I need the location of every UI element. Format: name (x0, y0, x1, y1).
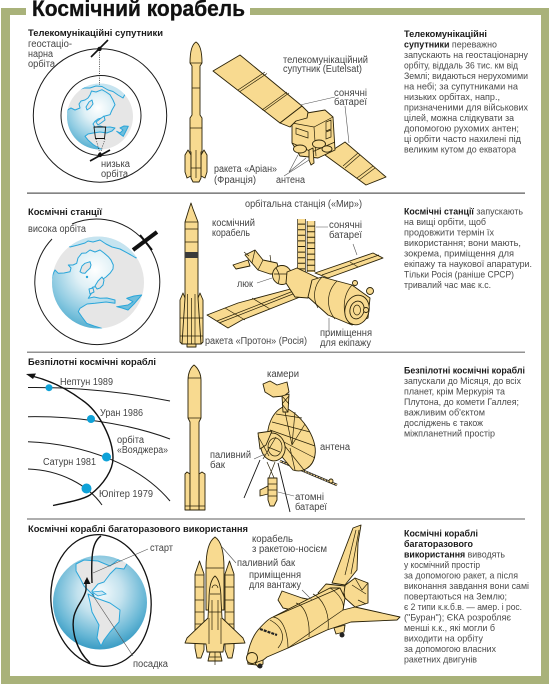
labels: planets: Уран 1986 (100, 408, 143, 419)
labels: planets: Юпітер 1979 (99, 489, 153, 500)
labels: station: для екіпажу (320, 338, 371, 349)
label: high orbit: висока орбіта (28, 223, 86, 235)
text block: telecom satellites: ці орбіти часто нахилені під (404, 134, 521, 145)
labels: probe: батареї (295, 501, 327, 513)
text block: reusable spacecraft: за допомогою власних (404, 644, 496, 655)
labels: shuttle: для вантажу (249, 580, 301, 591)
chart: launch and landing orbit globe (50, 534, 152, 667)
text block: reusable spacecraft: ("Буран"); ЄКА розробляє (404, 612, 511, 624)
text block: telecom satellites: на небі; за супутниками на (404, 82, 519, 92)
labels: shuttle (237, 533, 327, 591)
labels: shuttle: з ракетою-носієм (252, 544, 327, 555)
text block: telecom satellites: орбіту, віддаль 36 тис. км від (404, 60, 518, 72)
text block: unmanned spacecraft: запускали до Місяця, до всіх (404, 376, 521, 387)
labels: rocket and satellite: сонячні (334, 88, 367, 99)
labels: rocket and satellite: ракета «Аріан» (214, 164, 277, 175)
labels: station: космічний (212, 218, 255, 229)
text block: reusable spacecraft: багаторазового (404, 539, 473, 550)
text block: space stations: зокрема, приміщення для (404, 248, 514, 260)
text block: telecom satellites: Землі; видаються нерухомими (404, 71, 528, 82)
text block: reusable spacecraft: виходити на орбіту (404, 634, 483, 644)
icon: Proton rocket (180, 203, 203, 347)
icon: space shuttle orbiter (222, 525, 400, 668)
text block: space stations: тривалий час має к.с. (404, 280, 491, 291)
labels: probe: камери (267, 369, 299, 380)
orbit labels: орбіта (28, 58, 55, 70)
heading: reusable spacecraft: Космічні кораблі багаторазового використання (28, 524, 248, 535)
labels: probe: антена (320, 442, 350, 453)
text block: space stations: екіпажу та наукової апаратури. (404, 259, 532, 270)
labels: station: приміщення (320, 328, 372, 339)
text block: telecom satellites: супутники переважно (404, 40, 497, 50)
orbit labels: нарна (28, 49, 53, 60)
labels: rocket and satellite: батареї (334, 96, 367, 108)
labels: probe: бак (210, 459, 226, 471)
labels: launch and landing (133, 543, 173, 670)
labels: rocket and satellite: (Франція) (214, 175, 256, 186)
text block: unmanned spacecraft: Плутона, до комети Галлея; (404, 397, 519, 408)
labels: rocket and satellite: антена (276, 175, 305, 186)
text block: reusable spacecraft: виконання завдання вони самі (404, 581, 529, 592)
labels: shuttle: паливний бак (237, 557, 296, 569)
text block: unmanned spacecraft: важливим об'єктом (404, 408, 485, 418)
text block: unmanned spacecraft: міжпланетний простір (404, 428, 495, 440)
icon: Mir orbital station (207, 219, 383, 332)
text block: telecom satellites: запускають на геостаціонарну (404, 50, 528, 61)
panel: space stations (28, 198, 532, 349)
heading: telecom satellites: Телекомунікаційні супутники (28, 28, 163, 39)
labels: rocket and satellite: телекомунікаційний (283, 55, 368, 66)
text block: space stations (404, 206, 532, 291)
labels: probe: паливний (210, 450, 251, 461)
labels: station: ракета «Протон» (Росія) (205, 336, 307, 347)
labels: station: батареї (329, 229, 362, 241)
icon: Voyager probe (244, 381, 337, 512)
labels: shuttle: корабель (252, 533, 293, 545)
labels: station (205, 198, 372, 349)
text block: reusable spacecraft: є 2 типи к.к.б.в. — амер. і рос. (404, 602, 522, 613)
text block: reusable spacecraft: ракетних двигунів (404, 654, 477, 666)
panel: telecommunication satellites (28, 28, 528, 186)
labels: shuttle: приміщення (249, 570, 301, 581)
icon: shuttle with carrier rocket (185, 537, 245, 665)
text block: reusable spacecraft: повертаються на Землю; (404, 592, 507, 602)
text block: telecom satellites: допомогою рухомих антен; (404, 124, 519, 134)
orbit labels: низька (101, 159, 130, 170)
chart: Voyager trajectory past planets (26, 374, 170, 506)
labels: station: корабель (212, 227, 250, 239)
panel: unmanned spacecraft (26, 357, 525, 513)
text block: space stations: використання; вони мають, (404, 238, 521, 249)
text block: telecom satellites: призначеними для військових (404, 102, 528, 114)
text block: telecom satellites: низьких орбітах, напр., (404, 92, 500, 103)
section dividers (27, 193, 525, 520)
text block: unmanned spacecraft: Безпілотні космічні кораблі (404, 366, 525, 376)
text block: telecom satellites: цілей, можна слідкувати за (404, 113, 515, 124)
labels: probe: атомні (295, 492, 324, 503)
text block: reusable spacecraft: за допомогою ракет, а після (404, 570, 518, 582)
labels: planets: «Вояджера» (117, 445, 168, 456)
icon: Eutelsat satellite (213, 55, 386, 185)
icon: rocket (185, 365, 205, 510)
text block: unmanned spacecraft (404, 366, 525, 440)
text block: space stations: продовжити термін їх (404, 228, 494, 238)
labels: planets: Нептун 1989 (60, 377, 113, 388)
text block: telecom satellites (404, 29, 528, 156)
text block: reusable spacecraft: у космічний простір (404, 560, 480, 571)
labels: planets: Сатурн 1981 (43, 457, 96, 468)
text block: space stations: Тільки Росія (раніше СРСР) (404, 270, 514, 280)
labels: station: люк (237, 279, 254, 290)
orbit labels: геостаціо- (28, 39, 72, 50)
text block: reusable spacecraft (404, 528, 529, 666)
labels: planets: орбіта (117, 434, 144, 446)
text block: reusable spacecraft: менші к.к., які могли б (404, 623, 496, 634)
icon: Ariane rocket (185, 42, 207, 182)
labels: planets (43, 377, 168, 500)
labels: rocket and satellite (214, 55, 368, 186)
chart: high orbit globe (35, 219, 160, 345)
text block: telecom satellites: Телекомунікаційні (404, 29, 487, 40)
chart: orbits around the Earth (33, 40, 167, 182)
orbit labels: орбіта (101, 168, 128, 180)
heading: unmanned spacecraft: Безпілотні космічні кораблі (28, 357, 156, 368)
text block: space stations: на вищі орбіти, щоб (404, 217, 487, 228)
heading: space stations: Космічні станції (28, 207, 102, 218)
text block: telecom satellites: великим кутом до екватора (404, 144, 517, 156)
text block: space stations: Космічні станції запускають (404, 206, 523, 218)
text block: reusable spacecraft: використання виводять (404, 550, 505, 560)
labels: launch and landing: посадка (133, 659, 168, 670)
labels: station: орбітальна станція («Мир») (245, 198, 362, 210)
labels: station: сонячні (329, 220, 362, 231)
panel: reusable spacecraft (28, 524, 529, 671)
text block: unmanned spacecraft: досліджень є також (404, 418, 484, 429)
labels: probe (210, 369, 350, 513)
labels: launch and landing: старт (150, 543, 173, 554)
orbit labels (28, 39, 130, 180)
labels: rocket and satellite: супутник (Eutelsat) (283, 64, 362, 75)
text block: reusable spacecraft: Космічні кораблі (404, 528, 478, 540)
text block: unmanned spacecraft: планет, крім Меркурія та (404, 386, 506, 398)
